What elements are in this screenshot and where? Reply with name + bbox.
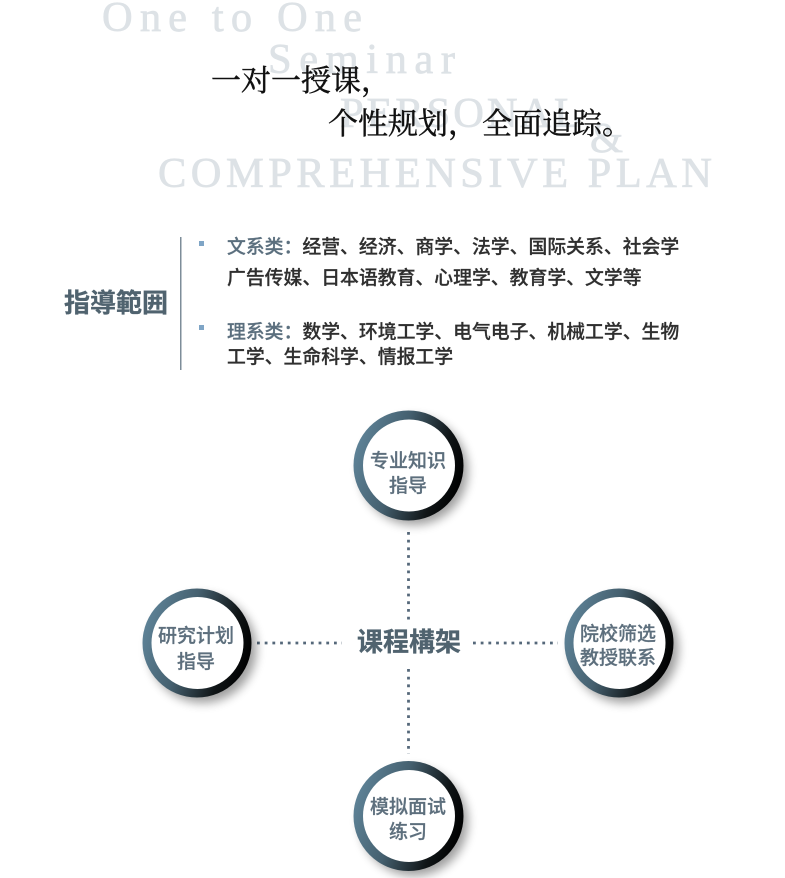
- node: left: 研究计划: [158, 625, 234, 647]
- node: right: 院校筛选: [580, 623, 656, 645]
- subject text continued: 工学、生命科学、情报工学: [227, 345, 453, 367]
- title: 个性规划，: [328, 108, 478, 141]
- node: bottom: 练习: [389, 821, 427, 843]
- bullet: [199, 325, 204, 330]
- node: top: 专业知识: [370, 450, 446, 472]
- node: bottom: 模拟面试: [370, 796, 446, 818]
- subject text continued: 广告传媒、日本语教育、心理学、教育学、文学等: [227, 267, 642, 288]
- title: [211, 65, 632, 141]
- node: top: 指导: [389, 475, 427, 497]
- node: right: [564, 588, 678, 703]
- dotted connectors: [257, 532, 558, 754]
- background English text: PERSONAL: [340, 90, 580, 137]
- subject text: 文系类：经营、经济、商学、法学、国际关系、社会学: [227, 236, 679, 257]
- background English text: Seminar: [268, 36, 455, 83]
- vertical divider: [180, 237, 182, 370]
- background English text: COMPREHENSIVE PLAN: [158, 150, 712, 197]
- node: top: [354, 410, 468, 525]
- node: right: 教授联系: [580, 647, 656, 669]
- heading: guidance scope: 指導範囲: [64, 288, 168, 318]
- background English text: &: [590, 115, 623, 162]
- subject text: 理系类：数学、环境工学、电气电子、机械工学、生物: [227, 321, 679, 342]
- node: left: [142, 588, 256, 703]
- node: bottom: [354, 761, 468, 876]
- node: left: 指导: [177, 651, 215, 673]
- title: 全面追踪。: [482, 108, 632, 141]
- panel: science subjects: [199, 321, 679, 367]
- panel: humanities subjects: [199, 236, 679, 288]
- bullet: [199, 241, 204, 246]
- title: 一对一授课，: [211, 65, 391, 98]
- background English text: [102, 0, 712, 197]
- center heading: course structure: 课程構架: [357, 627, 461, 657]
